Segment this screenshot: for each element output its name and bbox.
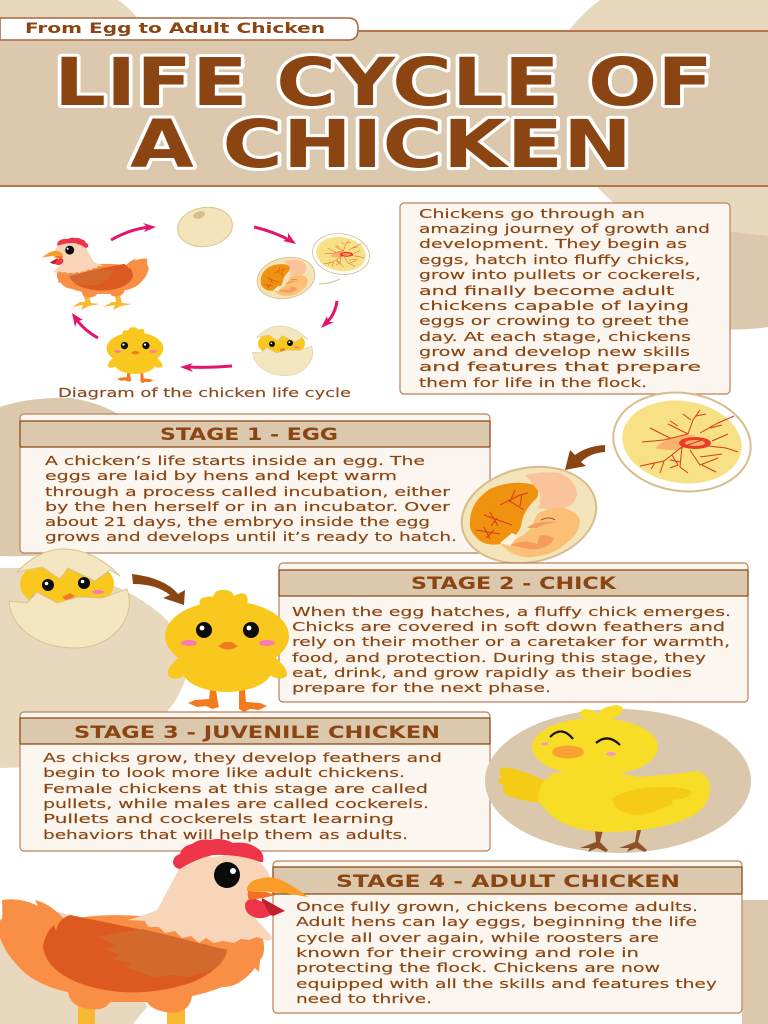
text block: eggs are laid by hens and kept warm (45, 468, 397, 483)
text block: eat, drink, and grow rapidly as their bodies (292, 665, 692, 680)
text block: pullets, while males are called cockerels. (43, 796, 429, 811)
text block: known for their crowing and role in (296, 945, 639, 960)
panel: stage 2 (279, 563, 748, 702)
panel: introduction: grow into pullets or cockerels, (419, 267, 701, 282)
arrows: cycle (72, 223, 337, 372)
text block: about 21 days, the embryo inside the egg (45, 514, 430, 529)
text block: rely on their mother or a caretaker for warmth, (292, 634, 730, 649)
text block: begin to look more like adult chickens. (43, 765, 405, 780)
text block: A chicken’s life starts inside an egg. The (45, 453, 425, 468)
panel: introduction: Chickens go through an (419, 206, 645, 221)
panel: stage 1 (20, 414, 490, 553)
panel: introduction: chickens capable of laying (419, 298, 689, 313)
text block: food, and protection. During this stage, they (292, 650, 707, 665)
panel: introduction: and finally become adult (419, 283, 674, 298)
text block: prepare for the next phase. (292, 680, 551, 695)
text block: cycle all over again, while roosters are (296, 930, 659, 945)
text block (296, 899, 718, 1006)
icon: chick (165, 590, 289, 712)
text block: Adult hens can lay eggs, beginning the life (296, 914, 697, 929)
panel: introduction: grow and develop new skills (419, 344, 690, 359)
title (54, 44, 713, 183)
panel: introduction: and features that prepare (419, 359, 702, 374)
heading: STAGE 3 - JUVENILE CHICKEN (74, 723, 440, 743)
panel: introduction: eggs, hatch into fluffy chicks, (419, 252, 690, 267)
text block: through a process called incubation, either (45, 484, 451, 499)
subtitle tag: From Egg to Adult Chicken (25, 21, 325, 37)
panel: introduction: amazing journey of growth and (419, 221, 710, 236)
icon: embryo in egg with vessels (453, 384, 757, 575)
text block: equipped with all the skills and features they (296, 976, 718, 991)
header band (0, 18, 768, 186)
text block: When the egg hatches, a fluffy chick emerges. (292, 604, 731, 619)
icon: small chick (107, 327, 163, 383)
panel: stage 3 (20, 712, 490, 851)
panel: stage 4 (273, 861, 742, 1013)
text block: by the hen herself or in an incubator. Over (45, 499, 451, 514)
title: A CHICKEN (130, 106, 632, 183)
icon: juvenile chicken on tan ellipse (485, 705, 751, 853)
heading: STAGE 1 - EGG (160, 425, 338, 445)
panel: introduction: development. They begin as (419, 236, 687, 251)
life cycle diagram (42, 204, 372, 400)
icon: small developing eggs (253, 230, 372, 304)
text block (292, 604, 731, 695)
arrow: brown (565, 445, 605, 470)
text block (43, 750, 442, 842)
icon: hatching chick (9, 549, 129, 648)
panel: introduction: day. At each stage, chickens (419, 329, 691, 344)
panel: introduction (400, 203, 730, 394)
text block: Pullets and cockerels start learning (43, 811, 394, 826)
heading: STAGE 2 - CHICK (411, 574, 617, 594)
text block: behaviors that will help them as adults. (43, 827, 408, 842)
text block: grows and develops until it’s ready to hatch. (45, 529, 457, 544)
icon: adult hen (0, 839, 308, 1024)
text block: protecting the flock. Chickens are now (296, 960, 660, 975)
icon: small hatching chick (252, 326, 313, 376)
text block: Once fully grown, chickens become adults. (296, 899, 698, 914)
title: LIFE CYCLE OF (54, 44, 713, 121)
icon: small egg (175, 204, 235, 250)
panel: introduction: eggs or crowing to greet the (419, 313, 689, 328)
subtitle tag (0, 18, 358, 40)
text block: Female chickens at this stage are called (43, 781, 428, 796)
caption: Diagram of the chicken life cycle (58, 385, 351, 400)
text block: need to thrive. (296, 991, 432, 1006)
arrow: brown curved (132, 574, 185, 605)
panel: introduction: them for life in the flock. (419, 375, 647, 390)
icon: small hen (42, 238, 149, 310)
text block: As chicks grow, they develop feathers and (43, 750, 442, 765)
text block (45, 453, 457, 544)
text block: Chicks are covered in soft down feathers and (292, 619, 725, 634)
heading: STAGE 4 - ADULT CHICKEN (336, 872, 680, 892)
